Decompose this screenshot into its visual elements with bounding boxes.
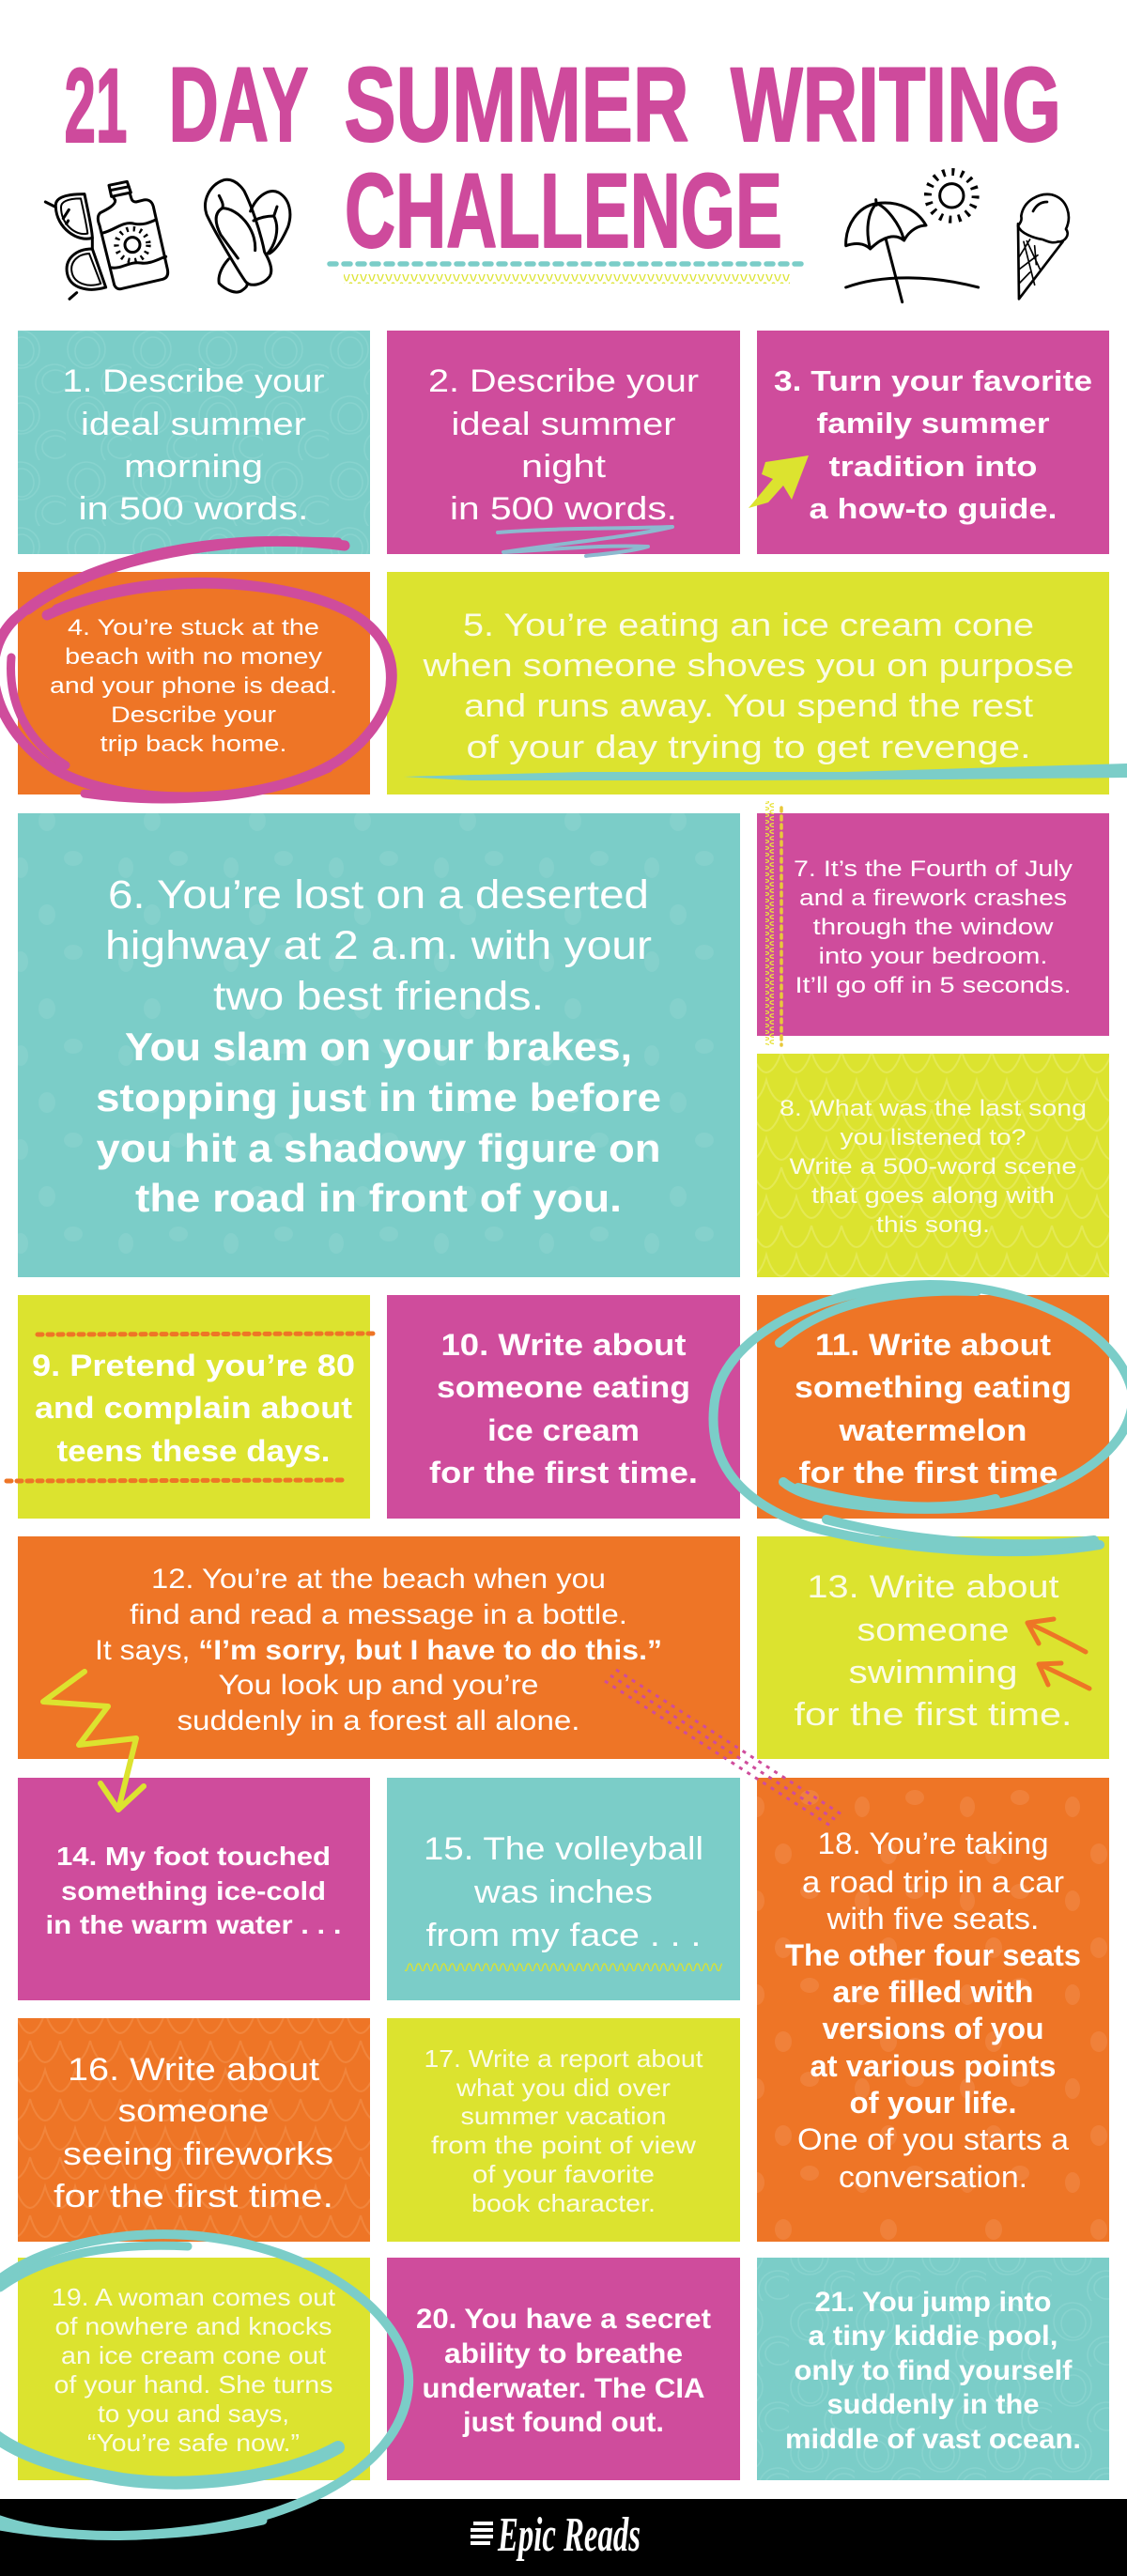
dotted orange lines on prompt 9 (7, 1334, 378, 1481)
panel: prompt 7: into your bedroom. (819, 944, 1048, 969)
panel: prompt 1: ideal summer (81, 407, 306, 442)
panel: prompt 13: someone (857, 1612, 1009, 1648)
panel: prompt 1: in 500 words. (79, 491, 308, 527)
panel: prompt 14: in the warm water . . . (45, 1910, 342, 1939)
icon: flip flops (206, 179, 290, 292)
panel: prompt 11: for the first time. (798, 1456, 1067, 1489)
panel: prompt 15: from my face . . . (426, 1918, 701, 1953)
panel: prompt 3: 3. Turn your favorite (774, 364, 1092, 397)
panel: prompt 21: only to find yourself (795, 2355, 1073, 2386)
panel: prompt 6 (18, 813, 740, 1277)
panel: prompt 17 (387, 2018, 740, 2242)
panel: prompt 20: 20. You have a secret (416, 2304, 711, 2335)
brush underline under prompt 5 (404, 764, 1127, 780)
panel: prompt 13: swimming (849, 1655, 1018, 1690)
panel: prompt 2: night (521, 449, 607, 485)
panel: prompt 7: through the window (813, 915, 1054, 940)
panel: prompt 18: One of you starts a (797, 2122, 1069, 2156)
panel: prompt 8 (757, 1054, 1109, 1277)
panel: prompt 10: 10. Write about (441, 1328, 687, 1362)
panel: prompt 19: to you and says, (98, 2399, 289, 2428)
icon: sunglasses and sunscreen bottle (45, 181, 168, 299)
panel: prompt 20: underwater. The CIA (423, 2373, 704, 2404)
footer bar with Epic Reads logo (0, 2499, 1127, 2576)
panel: prompt 7: and a firework crashes (799, 886, 1067, 911)
title: SUMMER (344, 46, 689, 163)
panel: prompt 6: You slam on your brakes, (125, 1025, 632, 1069)
panel: prompt 8: Write a 500-word scene (789, 1154, 1076, 1180)
panel: prompt 9: teens these days. (56, 1434, 331, 1468)
panel: prompt 11: 11. Write about (815, 1328, 1051, 1362)
doodle: magenta dotted diagonal from prompt 12 to prompt 18 (605, 1670, 841, 1826)
panel: prompt 20: ability to breathe (444, 2338, 683, 2369)
doodle: lime wiggle and dotted line on prompt 7 (765, 801, 781, 1045)
panel: prompt 1: morning (124, 449, 263, 485)
panel: prompt 10: someone eating (437, 1370, 690, 1404)
panel: prompt 15: 15. The volleyball (424, 1831, 703, 1867)
panel: prompt 12: suddenly in a forest all alone. (177, 1705, 580, 1736)
panel: prompt 5: of your day trying to get revenge. (466, 730, 1031, 765)
icon: sun (928, 172, 976, 220)
panel: prompt 18 (757, 1778, 1109, 2242)
title: DAY (169, 46, 308, 163)
panel: prompt 12: find and read a message in a bottle. (130, 1599, 627, 1630)
panel: prompt 19: “You’re safe now.” (87, 2429, 300, 2457)
panel: prompt 16: for the first time. (54, 2179, 333, 2214)
title: 21 (64, 47, 128, 164)
panel: prompt 2: in 500 words. (450, 491, 677, 527)
panel: prompt 8: this song. (876, 1212, 990, 1238)
panel: prompt 9 (18, 1295, 370, 1519)
panel: prompt 4: beach with no money (65, 644, 322, 670)
panel: prompt 7: It’ll go off in 5 seconds. (795, 973, 1071, 998)
panel: prompt 5: 5. You’re eating an ice cream cone (463, 608, 1034, 643)
panel: prompt 4: and your phone is dead. (50, 673, 337, 699)
panel: prompt 19: of your hand. She turns (54, 2370, 332, 2399)
panel: prompt 4: 4. You’re stuck at the (68, 615, 319, 640)
panel: prompt 17: summer vacation (460, 2102, 667, 2130)
panel: prompt 18: a road trip in a car (802, 1865, 1064, 1899)
panel: prompt 16: seeing fireworks (63, 2136, 333, 2172)
panel: prompt 16: someone (118, 2093, 269, 2129)
title (64, 46, 1061, 270)
panel: prompt 18: at various points (810, 2049, 1056, 2083)
panel: prompt 14: 14. My foot touched (56, 1842, 331, 1871)
panel: prompt 8: that goes along with (811, 1183, 1055, 1209)
panel: prompt 21: 21. You jump into (815, 2287, 1052, 2318)
panel: prompt 3 (757, 331, 1109, 554)
footer bar with Epic Reads logo: Epic Reads (497, 2508, 641, 2562)
panel: prompt 1: 1. Describe your (62, 363, 325, 399)
panel: prompt 11: watermelon (838, 1413, 1027, 1447)
panel: prompt 13: for the first time. (795, 1697, 1073, 1733)
panel: prompt 18: versions of you (823, 2012, 1044, 2045)
panel: prompt 2: ideal summer (451, 407, 676, 442)
panel: prompt 21: middle of vast ocean. (785, 2424, 1081, 2455)
panel: prompt 6: you hit a shadowy figure on (96, 1126, 661, 1170)
panel: prompt 18: conversation. (839, 2160, 1027, 2194)
panel: prompt 4 (18, 572, 370, 794)
panel: prompt 20: just found out. (462, 2407, 664, 2438)
arrow: lime arrow in prompt 3 (749, 455, 809, 508)
panel: prompt 12: It says, “I’m sorry, but I have to do this.” (95, 1635, 662, 1666)
panel: prompt 18: The other four seats (785, 1938, 1081, 1972)
panel: prompt 10 (387, 1295, 740, 1519)
panel: prompt 10: for the first time. (429, 1456, 698, 1489)
brush underline under prompt 2 (498, 527, 672, 556)
panel: prompt 5: and runs away. You spend the rest (464, 688, 1034, 724)
panel: prompt 12: You look up and you’re (218, 1670, 539, 1701)
panel: prompt 16: 16. Write about (68, 2052, 320, 2088)
panel: prompt 6: the road in front of you. (135, 1176, 622, 1220)
panel: prompt 4: trip back home. (100, 732, 287, 757)
panel: prompt 17: of your favorite (472, 2160, 655, 2188)
panel: prompt 21: a tiny kiddie pool, (808, 2321, 1058, 2352)
panel: prompt 15: was inches (473, 1874, 653, 1910)
panel: prompt 5 (387, 572, 1109, 794)
panel: prompt 2: 2. Describe your (428, 363, 699, 399)
panel: prompt 19: 19. A woman comes out (52, 2283, 336, 2311)
panel: prompt 7 (757, 813, 1109, 1036)
panel: prompt 21 (757, 2258, 1109, 2480)
panel: prompt 5: when someone shoves you on purpose (422, 648, 1074, 684)
panel: prompt 17: what you did over (455, 2074, 671, 2102)
panel: prompt 6: highway at 2 a.m. with your (105, 923, 652, 968)
panel: prompt 6: 6. You’re lost on a deserted (108, 872, 649, 918)
panel: prompt 13: 13. Write about (808, 1569, 1059, 1605)
panel: prompt 6: two best friends. (213, 974, 544, 1019)
panel: prompt 17: from the point of view (431, 2131, 696, 2159)
panel: prompt 2 (387, 331, 740, 554)
panel: prompt 14 (18, 1778, 370, 2000)
panel: prompt 21: suddenly in the (826, 2389, 1039, 2420)
panel: prompt 20 (387, 2258, 740, 2480)
panel: prompt 12 (18, 1536, 740, 1759)
title underline: teal dots and lime squiggle (330, 264, 803, 284)
panel: prompt 16 (18, 2018, 370, 2242)
panel: prompt 1 (18, 331, 370, 554)
panel: prompt 6: stopping just in time before (96, 1075, 661, 1119)
panel: prompt 7: 7. It’s the Fourth of July (794, 856, 1073, 882)
panel: prompt 4: Describe your (111, 702, 276, 728)
panel: prompt 10: ice cream (487, 1413, 640, 1447)
panel: prompt 11: something eating (795, 1370, 1072, 1404)
panel: prompt 19: an ice cream cone out (61, 2341, 327, 2369)
panel: prompt 19: of nowhere and knocks (54, 2312, 332, 2340)
brush circle around prompt 11 (714, 1285, 1127, 1551)
panel: prompt 3: tradition into (828, 450, 1037, 483)
arrow: lime lightning bolt from prompt 12 to prompt 14 (43, 1672, 144, 1810)
panel: prompt 13 (757, 1536, 1109, 1759)
brush circle around prompt 4 (0, 541, 392, 799)
arrows: orange arrows in prompt 13 (1027, 1619, 1089, 1689)
panel: prompt 17: 17. Write a report about (425, 2044, 703, 2073)
panel: prompt 8: you listened to? (840, 1125, 1026, 1150)
panel: prompt 17: book character. (471, 2189, 656, 2217)
panel: prompt 3: family summer (817, 407, 1050, 440)
panel: prompt 12: 12. You’re at the beach when you (151, 1564, 606, 1595)
panel: prompt 18: 18. You’re taking (817, 1827, 1048, 1860)
panel: prompt 18: are filled with (832, 1975, 1033, 2009)
brush circle around prompt 19 (0, 2234, 409, 2536)
panel: prompt 19 (18, 2258, 370, 2480)
title: CHALLENGE (345, 152, 782, 270)
icon: beach umbrella (846, 200, 979, 302)
panel: prompt 9: 9. Pretend you’re 80 (32, 1349, 355, 1382)
panel: prompt 14: something ice-cold (61, 1876, 326, 1905)
panel: prompt 9: and complain about (35, 1391, 352, 1425)
panel: prompt 11 (757, 1295, 1109, 1519)
panel: prompt 18: with five seats. (826, 1902, 1039, 1936)
panel: prompt 18: of your life. (849, 2086, 1016, 2120)
panel: prompt 3: a how-to guide. (810, 492, 1058, 525)
icon: ice cream cone (1018, 194, 1069, 299)
panel: prompt 15 (387, 1778, 740, 2000)
panel: prompt 8: 8. What was the last song (780, 1096, 1087, 1121)
